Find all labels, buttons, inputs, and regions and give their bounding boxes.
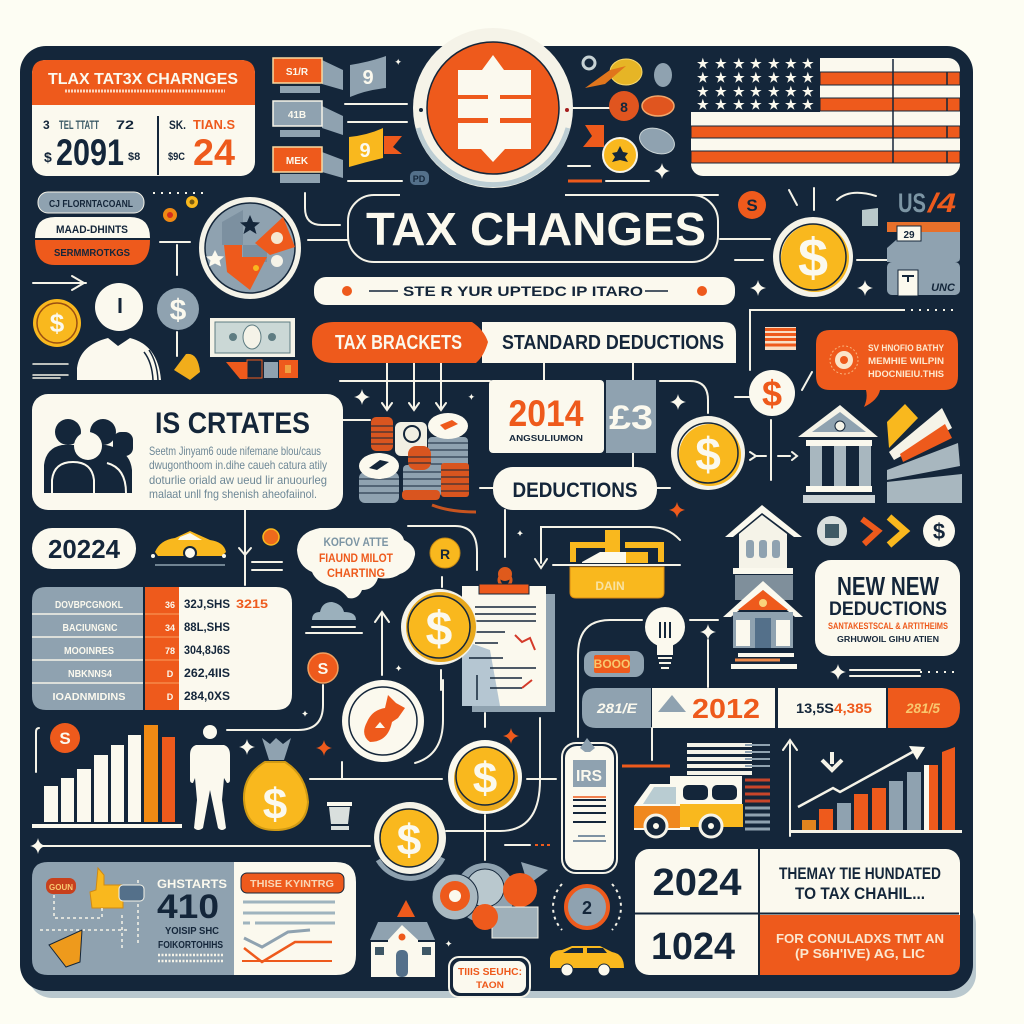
connector lines <box>33 104 920 860</box>
icon row: $ <box>933 519 945 544</box>
card: 2014: ANGSULIUMON <box>509 434 583 443</box>
body text: Seetm Jinyam6 oude nifemane blou/caus <box>149 444 321 458</box>
stamp label: TIIIS SEUHC: <box>458 967 522 978</box>
yellow folder <box>553 530 680 598</box>
gold coin left <box>33 299 81 347</box>
body text: doturlie oriald aw ueud lir anuourleg <box>149 473 327 487</box>
panel: bottom-left insights: FOIKORTOHIHS <box>158 940 223 951</box>
document cards: UNC <box>931 282 956 294</box>
left figures: $8 <box>128 151 140 163</box>
subtitle bar: STE R YUR UPTEDC IP ITARO <box>403 283 643 299</box>
document cards: 29 <box>903 230 915 241</box>
light bulb <box>645 607 685 668</box>
striped orange icon <box>765 327 796 350</box>
panel: new deductions: NEW NEW <box>837 571 939 601</box>
body text: malaat unll fng shenish aheofaiinol. <box>149 487 317 501</box>
bar chart: S <box>59 729 71 748</box>
table: MOOINRES <box>64 646 114 657</box>
van <box>634 745 770 837</box>
speech bubble: SV HNOFIO BATHY <box>868 343 944 353</box>
data strip: 4,385 <box>834 700 872 716</box>
table: DOVBPCGNOKL <box>55 600 123 611</box>
stamp label <box>449 957 530 997</box>
gold coin left: $ <box>50 308 65 338</box>
taxi car <box>550 946 624 976</box>
card: 2014 <box>489 380 656 453</box>
stat text: GHSTARTS <box>157 877 227 891</box>
irs card: IRS <box>576 768 602 785</box>
panel: new deductions: GRHUWOIL GIHU ATIEN <box>837 635 939 644</box>
us label: US <box>898 188 926 218</box>
tags: ribbon labels: MEK <box>286 156 309 167</box>
school building <box>370 900 435 977</box>
pill: 2024 <box>32 528 136 569</box>
pills: categories: CJ FLORNTACOANL <box>49 199 133 210</box>
panel: new deductions <box>815 560 960 656</box>
right figures: TIAN.S <box>193 117 235 132</box>
orange sparkles <box>316 502 685 756</box>
coin stacks <box>359 413 469 503</box>
panel: bottom-left insights <box>32 862 356 975</box>
badge: booo: BOOO <box>594 657 630 671</box>
speech bubble: HDOCNIEIU.THIS <box>868 369 944 379</box>
cup icon <box>327 802 352 830</box>
table <box>32 587 292 710</box>
table: 284,0XS <box>184 689 230 703</box>
person icon <box>77 283 161 380</box>
central emblem <box>413 28 573 188</box>
tab: tax brackets: TAX BRACKETS <box>335 332 462 354</box>
coin middle right <box>671 416 745 490</box>
right figures: 24 <box>193 132 235 173</box>
left figures <box>43 118 140 173</box>
text lines <box>243 902 335 923</box>
coin center lower <box>448 740 522 814</box>
flag <box>691 50 960 176</box>
pills: categories: MAAD-DHINTS <box>56 224 128 236</box>
table: NBKNNS4 <box>68 669 112 680</box>
icon: camera <box>119 885 144 901</box>
heading: tax changes: TLAX TAT3X CHARNGES <box>48 71 238 88</box>
table: D <box>167 669 174 679</box>
irs card <box>562 738 617 873</box>
coin cluster top <box>583 57 678 172</box>
body text: dwugonthoom in.dihe caueh catura atily <box>149 458 327 472</box>
yellow folder: DAIN <box>595 579 625 593</box>
panel: new deductions: DEDUCTIONS <box>829 599 947 620</box>
table: BACIUNGNC <box>62 623 118 634</box>
growth chart <box>790 746 962 833</box>
flag icons near emblem: PD <box>413 174 426 184</box>
small orange and yellow dots <box>163 196 198 222</box>
speech cloud: FIAUND MILOT <box>319 551 394 565</box>
large coin left of clipboard: $ <box>426 603 453 656</box>
coin right of title: $ <box>798 228 828 288</box>
data strip: 281/5 <box>905 700 940 716</box>
table: 262,4IIS <box>184 666 230 680</box>
panel: bottom-right summary: (P S6H'IVE) AG, LIC <box>795 946 926 961</box>
flag icons near emblem <box>349 56 429 185</box>
table: 88L,SHS <box>184 620 230 634</box>
card: 2014: 2014 <box>508 393 584 434</box>
pills: categories <box>35 192 150 265</box>
coin middle right: $ <box>695 428 721 480</box>
panel: bottom-right summary <box>635 849 960 975</box>
standing person <box>190 725 230 830</box>
tags: ribbon labels <box>273 58 343 183</box>
icon: small tag <box>46 878 76 894</box>
coin right of title <box>773 217 853 297</box>
pill <box>241 873 344 893</box>
panel: bottom-left insights: YOISIP SHC <box>165 926 219 937</box>
large coin left of clipboard <box>401 589 477 665</box>
panel: bottom-right summary: 1024 <box>651 926 735 968</box>
pill: 2024: 20224 <box>48 534 121 564</box>
badge: booo <box>584 651 644 677</box>
white dollar coin: $ <box>762 373 782 414</box>
table: 78 <box>165 646 175 656</box>
panel: bottom-right summary: THEMAY TIE HUNDATED <box>779 864 941 883</box>
small cloud <box>312 602 356 620</box>
small yellow coin <box>430 538 460 568</box>
coin center lower: $ <box>473 754 497 803</box>
table: 36 <box>165 600 175 610</box>
ringed badge: 2 <box>582 898 592 918</box>
connector accents <box>153 181 958 845</box>
flag icons near emblem: 9 <box>362 67 374 89</box>
right figures <box>168 117 235 173</box>
right figures: SK. <box>169 118 186 132</box>
line chart <box>244 930 310 947</box>
panel: is crtates <box>32 394 343 510</box>
fanned cards <box>887 404 962 503</box>
icon: dashed paths <box>40 880 138 950</box>
tab: standard deductions: STANDARD DEDUCTIONS <box>502 332 724 354</box>
speech cloud <box>297 528 415 598</box>
data strip: 2012 <box>692 693 760 724</box>
bar chart <box>32 723 182 828</box>
left figures: 3 <box>43 118 50 132</box>
icon row <box>817 515 955 547</box>
panel: bottom-left insights: 410 <box>157 888 219 926</box>
pills: categories: SERMMROTKGS <box>54 248 130 259</box>
speech cloud: KOFOV ATTE <box>324 535 388 549</box>
small orange coin <box>738 191 766 219</box>
bank <box>798 405 878 503</box>
panel shadow <box>28 900 976 998</box>
data strip: 13,5S <box>796 700 834 716</box>
pill: deductions: DEDUCTIONS <box>512 479 638 502</box>
small orange coin: S <box>746 196 758 215</box>
panel: bottom-right summary: TO TAX CHAHIL... <box>795 884 925 903</box>
gray dollar coin <box>157 288 199 330</box>
table: D <box>167 692 174 702</box>
title <box>348 190 718 262</box>
icon: people <box>44 419 133 493</box>
speech bubble <box>816 330 958 407</box>
small receipt icon <box>862 208 878 226</box>
white dollar coin <box>749 370 795 416</box>
icon: tag arrow <box>49 930 82 967</box>
panel: new deductions: SANTAKESTSCAL & ARTITHEIMS <box>828 621 948 631</box>
body text <box>149 444 327 501</box>
circular US map <box>199 197 301 299</box>
panel: bottom-right summary: 2024 <box>652 862 742 904</box>
flag stars <box>697 56 814 112</box>
tab: tax brackets <box>312 322 488 363</box>
small orange coin near car <box>263 529 279 545</box>
key medallion <box>342 680 424 762</box>
speech bubble: MEMHIE WILPIN <box>868 356 944 366</box>
coin cluster top: 8 <box>620 99 628 115</box>
flag stars: ★★★★★★★ <box>697 97 814 112</box>
icon: thumbs up <box>90 868 123 908</box>
money bag: $ <box>263 780 287 829</box>
right figures: $9C <box>168 151 185 163</box>
panel: top-left tax summary <box>32 60 255 176</box>
table: 3215 <box>236 597 268 611</box>
flag stars: ★★★★★★★ <box>697 70 814 85</box>
left figures: 2091 <box>56 132 124 173</box>
panel: bottom-right summary: FOR CONULADXS TMT AN <box>776 931 944 946</box>
small yellow coin: R <box>440 546 450 562</box>
bell icon <box>174 354 200 380</box>
heading: IS CRTATES <box>155 407 310 440</box>
tab: standard deductions <box>482 322 736 363</box>
us label: /4 <box>927 188 956 218</box>
coin pile <box>432 862 548 938</box>
flag stars: ★★★★★★★ <box>697 56 814 71</box>
table: 304,8J6S <box>184 643 230 657</box>
table: 34 <box>165 623 175 633</box>
left figures: $ <box>44 149 52 165</box>
pill: deductions <box>493 467 657 510</box>
document cards <box>887 222 960 296</box>
money bag <box>244 738 308 830</box>
houses <box>723 505 803 669</box>
banknote <box>210 318 295 357</box>
speech cloud: CHARTING <box>327 566 385 580</box>
card: 2014: £3 <box>609 399 653 437</box>
data strip: 281/E <box>596 700 638 716</box>
small tag strip <box>226 360 298 379</box>
ringed badge <box>553 884 621 930</box>
data strip <box>582 688 960 728</box>
coin lower <box>374 802 446 878</box>
left figures: 72 <box>116 118 134 132</box>
stamp label: TAON <box>476 980 504 990</box>
table: IOADNMIDINS <box>52 692 126 703</box>
panel: bottom-left insights: THISE KYINTRG <box>250 879 334 890</box>
subtitle bar <box>314 277 735 305</box>
table: 32J,SHS <box>184 597 230 611</box>
orange badge with line <box>308 653 338 683</box>
clipboard <box>462 567 555 712</box>
orange badge with line: S <box>318 661 329 678</box>
icon: small tag: GOUN <box>49 883 73 892</box>
coin lower: $ <box>397 816 421 865</box>
yellow car <box>151 531 226 565</box>
left figures: TEL TTATT <box>59 118 99 132</box>
tags: ribbon labels: 41B <box>288 110 306 121</box>
flag stars: ★★★★★★★ <box>697 84 814 99</box>
us label <box>898 188 956 218</box>
tags: ribbon labels: S1/R <box>286 67 309 78</box>
title: TAX CHANGES <box>366 203 706 255</box>
flag icons near emblem: 9 <box>359 140 371 162</box>
gray dollar coin: $ <box>170 294 187 327</box>
sparkles <box>30 59 873 947</box>
